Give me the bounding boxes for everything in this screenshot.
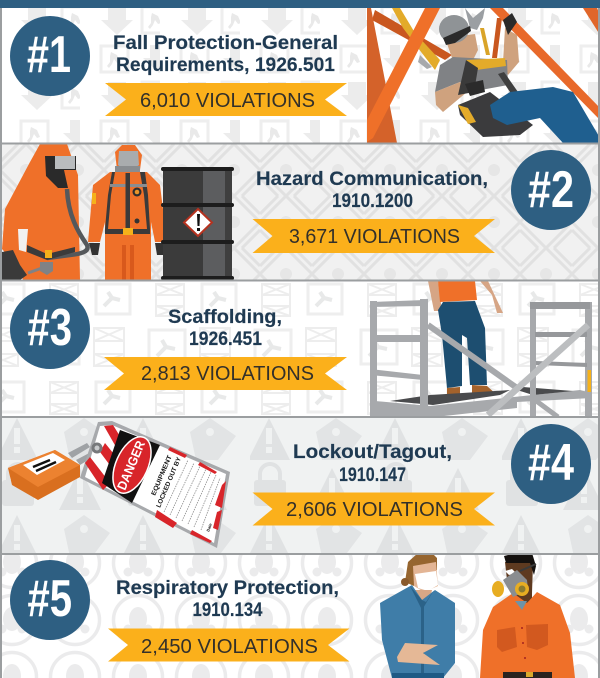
title 1: Requirements, 1926.501	[116, 55, 335, 76]
ribbon 1	[105, 83, 347, 116]
title 5: Respiratory Protection,	[116, 578, 339, 599]
title 3: Scaffolding,	[168, 307, 282, 328]
rank badge 5: #5	[28, 570, 72, 628]
title 5	[116, 578, 339, 621]
title 3: 1926.451	[189, 329, 262, 350]
title 4	[293, 442, 452, 486]
illustration: hazmat suits and drum	[2, 144, 234, 280]
rank badge 3: #3	[28, 299, 72, 357]
rank badge 2: #2	[528, 161, 574, 219]
panel: rank 2 hazard communication	[0, 144, 600, 280]
ribbon 5	[108, 628, 350, 662]
rank badge 1: #1	[27, 26, 71, 84]
title 2: Hazard Communication,	[256, 169, 488, 190]
illustration: padlock and danger tag: Date	[205, 522, 213, 532]
illustration: padlock and danger tag: EQUIPMENT	[150, 454, 174, 497]
ribbon 2	[252, 219, 495, 253]
illustration: workers wearing respirators	[380, 553, 575, 678]
panel: rank 3 scaffolding	[0, 281, 600, 417]
ribbon 4: 2,606 VIOLATIONS	[286, 498, 463, 521]
illustration: padlock and danger tag: LOCKED OUT BY	[155, 456, 183, 509]
title 4: 1910.147	[339, 465, 406, 486]
ribbon 2: 3,671 VIOLATIONS	[289, 225, 460, 248]
title 5: 1910.134	[192, 600, 263, 621]
rank badge 5	[10, 560, 90, 640]
ribbon 4	[252, 492, 495, 526]
panel: rank 5 respiratory protection	[0, 553, 600, 678]
title 1: Fall Protection-General	[113, 33, 338, 54]
rank badge 4: #4	[528, 434, 574, 492]
illustration: padlock and danger tag	[8, 421, 230, 548]
rank badge 2	[511, 150, 591, 230]
title 2: 1910.1200	[332, 191, 413, 212]
rank badge 3	[10, 289, 90, 369]
rank badge 1	[10, 16, 90, 96]
panel: rank 1 fall protection	[0, 8, 600, 143]
title 3	[168, 307, 282, 350]
panel: rank 4 lockout tagout	[0, 418, 600, 554]
ribbon 3: 2,813 VIOLATIONS	[141, 362, 314, 385]
ribbon 3	[104, 357, 347, 390]
illustration: worker on scaffold	[370, 281, 592, 417]
rank badge 4	[511, 424, 591, 504]
illustration: worker in harness on orange beams	[367, 8, 600, 143]
illustration: padlock and danger tag: DANGER	[114, 438, 148, 492]
title 2	[256, 169, 488, 212]
ribbon 1: 6,010 VIOLATIONS	[140, 89, 315, 112]
title 1	[113, 33, 338, 76]
title 4: Lockout/Tagout,	[293, 442, 452, 463]
ribbon 5: 2,450 VIOLATIONS	[141, 635, 318, 658]
